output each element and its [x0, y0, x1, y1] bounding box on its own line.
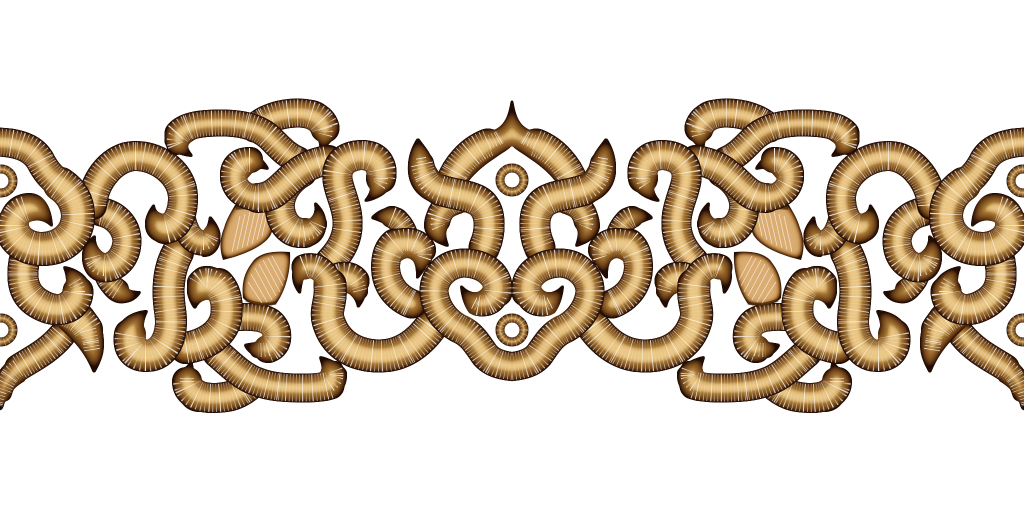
scroll: lower-left spike	[45, 296, 103, 372]
scroll: centre crown arch	[438, 100, 524, 190]
ornament: left half	[0, 100, 540, 412]
scroll: lower spiral	[186, 267, 232, 348]
scroll: vertical stem with hook	[117, 252, 178, 356]
ring: centre bottom	[500, 318, 524, 342]
scroll: S stem with top hook	[330, 155, 394, 262]
scroll: small bird body	[386, 231, 429, 304]
scroll: lower-left curl	[0, 335, 62, 412]
scroll: top-left arc and spiral	[0, 142, 78, 249]
scroll: inner S tail	[97, 268, 140, 302]
leaf: lower satin leaf	[243, 252, 290, 306]
ring: right edge top	[1011, 169, 1024, 193]
scroll: big lower curve	[293, 256, 432, 356]
scroll: top band hook	[255, 101, 335, 151]
ring: left edge top	[0, 169, 13, 193]
scroll: centre-left upper curl	[233, 154, 328, 198]
ring: right edge bottom	[1011, 318, 1024, 342]
ornament: right half mirrored	[484, 100, 1024, 412]
scroll: small bird tip	[372, 208, 413, 240]
rings: stitched circles	[0, 168, 1024, 342]
scroll: top band long	[165, 122, 298, 160]
scroll: large arch	[92, 156, 183, 242]
scroll: centre horn	[409, 139, 489, 248]
scroll: bottom loop left	[178, 362, 252, 411]
ring: centre top	[500, 168, 524, 192]
scroll: lower curl right	[228, 317, 280, 357]
leaf: upper satin leaf	[220, 203, 274, 260]
scroll: centre spiral	[434, 263, 540, 368]
scroll: inner S curl	[83, 212, 127, 281]
ring: left edge bottom	[0, 318, 13, 342]
scroll: lower-left hook	[23, 262, 90, 310]
scroll: centre-left lower curl	[280, 172, 325, 246]
scroll: bottom band right	[217, 353, 346, 400]
scroll: hook on big curve	[330, 270, 365, 307]
scroll: small right hook of arch	[183, 217, 220, 256]
scroll: centre inner curl	[425, 190, 468, 246]
